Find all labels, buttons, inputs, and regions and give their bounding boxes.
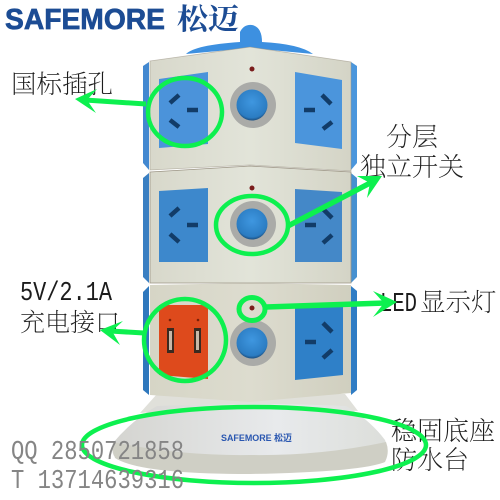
label: layered independent switch bbox=[360, 123, 464, 182]
arrow: LED label bbox=[266, 291, 397, 317]
watermark contact info: QQ 2850721858 bbox=[11, 438, 184, 468]
label: stable waterproof base: 稳固底座 bbox=[391, 417, 495, 446]
top cap and knob bbox=[186, 25, 313, 54]
tier 1 right socket bbox=[295, 72, 342, 149]
label: national standard socket: 国标插孔 bbox=[11, 70, 113, 99]
label: LED indicator bbox=[380, 288, 497, 320]
right blue strips bbox=[351, 62, 357, 395]
highlight: LED bbox=[239, 298, 265, 320]
arrow: USB label bbox=[100, 321, 144, 345]
tier 3 USB charging panel bbox=[159, 305, 208, 379]
base logo: SAFEMORE 松迈 bbox=[221, 432, 292, 443]
highlight: base bbox=[82, 407, 426, 483]
LED indicators bbox=[250, 66, 254, 310]
tier 2 left socket bbox=[159, 188, 208, 262]
label: charging port: 5V/2.1A bbox=[20, 279, 113, 309]
tier 3 body bbox=[150, 283, 351, 402]
green highlights and arrows bbox=[75, 78, 426, 483]
highlight: USB panel bbox=[144, 299, 226, 381]
highlight: socket bbox=[148, 78, 222, 146]
watermark contact info bbox=[11, 438, 184, 497]
label: charging port: 充电接口 bbox=[20, 309, 120, 337]
label: layered independent switch: 分层 bbox=[386, 123, 438, 152]
label: stable waterproof base: 防水台 bbox=[391, 446, 469, 475]
tier 2 right socket bbox=[295, 189, 342, 262]
label: layered independent switch: 独立开关 bbox=[360, 153, 464, 182]
tier 1 body bbox=[150, 47, 351, 171]
logo Chinese name: 松迈 bbox=[177, 3, 239, 36]
label: stable waterproof base bbox=[391, 417, 495, 475]
arrow: switch label bbox=[288, 176, 382, 226]
label: LED indicator: LED bbox=[380, 290, 417, 320]
label: LED indicator: 显示灯 bbox=[420, 288, 497, 317]
watermark contact info: T 13714639316 bbox=[11, 467, 184, 497]
arrow: socket label bbox=[75, 89, 146, 113]
tier 2 switch bbox=[230, 201, 276, 247]
tier 3 switch bbox=[230, 320, 276, 366]
tier 1 switch bbox=[230, 82, 276, 128]
base bbox=[112, 394, 388, 474]
power tower bbox=[112, 25, 388, 474]
tier 2 body bbox=[150, 166, 351, 283]
tier 1 left socket bbox=[159, 72, 208, 148]
logo wordmark: SAFEMORE bbox=[5, 4, 165, 36]
label: charging port bbox=[20, 279, 120, 337]
highlight: switch bbox=[216, 196, 288, 254]
logo bbox=[5, 3, 239, 36]
left blue strips bbox=[143, 62, 149, 395]
tier 3 right socket bbox=[295, 306, 343, 380]
